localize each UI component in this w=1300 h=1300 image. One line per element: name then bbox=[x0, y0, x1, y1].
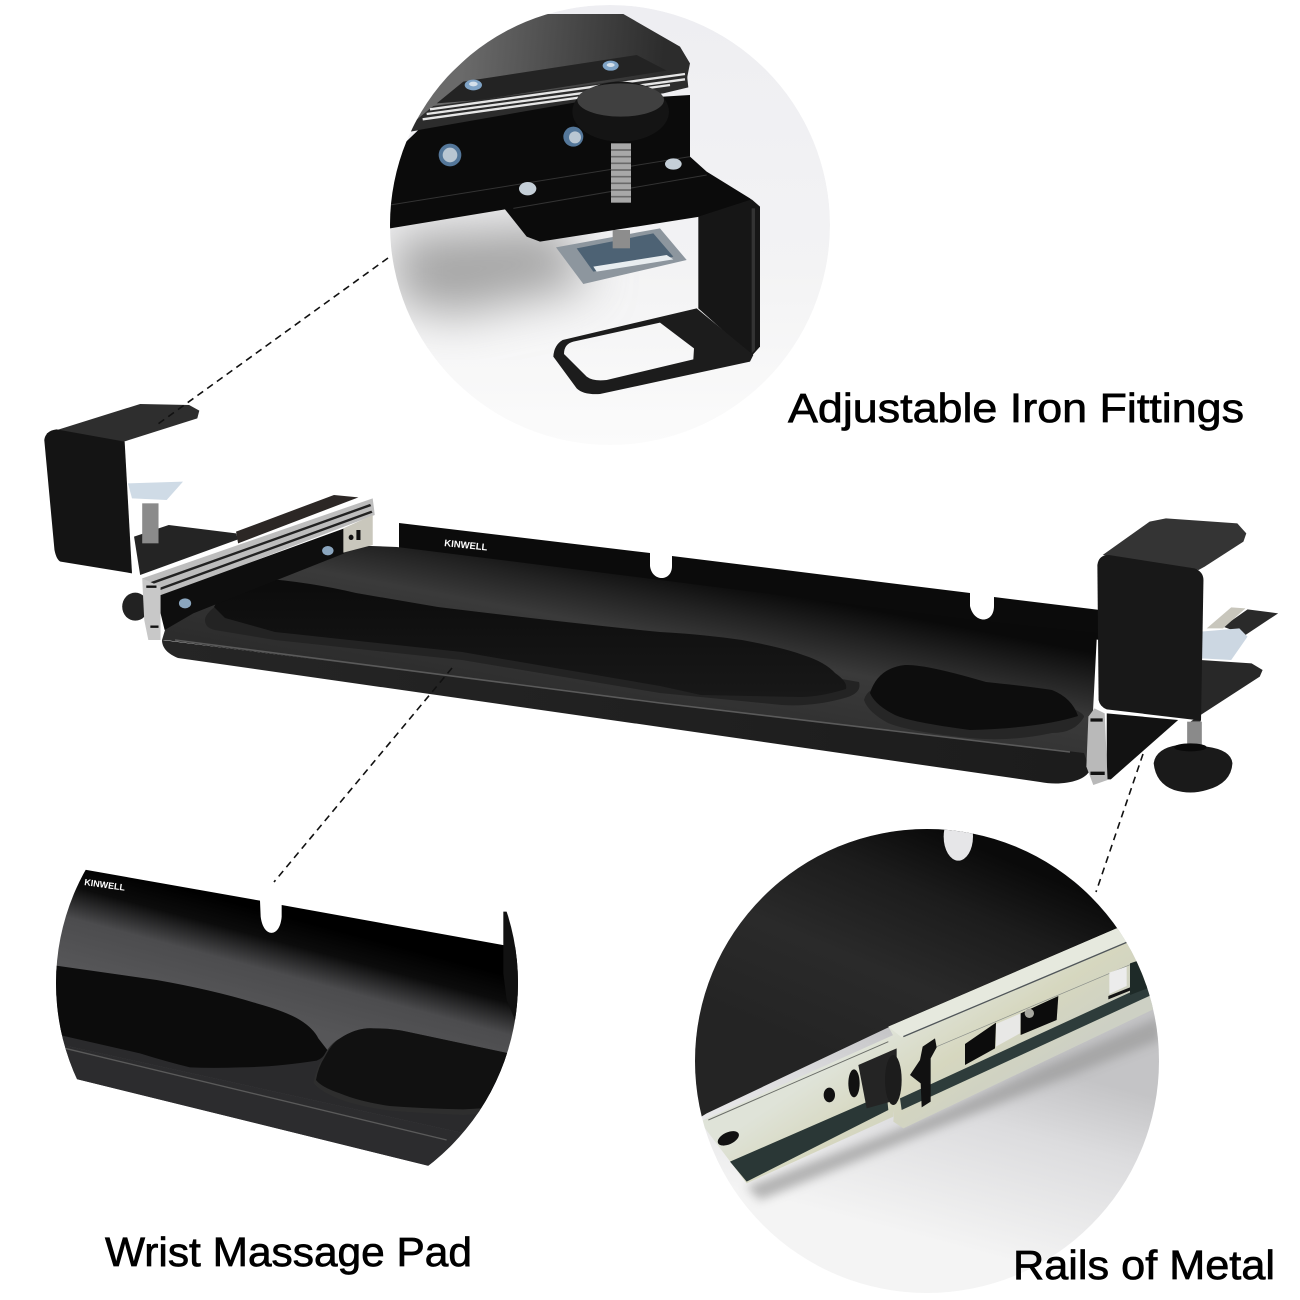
adjustment knob bbox=[1154, 743, 1232, 792]
circle background bbox=[390, 5, 830, 356]
back wall bbox=[399, 523, 1100, 640]
outer rail top band bbox=[888, 928, 1128, 1037]
bracket under tray bbox=[1107, 713, 1178, 779]
black tray plate bbox=[695, 829, 1118, 1116]
panel: adjustable iron fittings close-up bbox=[390, 5, 830, 394]
brand mark: KINWELL bbox=[444, 538, 488, 554]
knob behind bbox=[122, 593, 148, 621]
upper plate bbox=[1223, 609, 1278, 635]
rail bracket bbox=[156, 528, 344, 630]
inner rail groove bbox=[730, 1093, 888, 1182]
long pad bbox=[40, 963, 327, 1068]
dashed leader: fittings bbox=[158, 258, 388, 424]
front face bbox=[64, 1046, 462, 1166]
clamp foot with opening bbox=[553, 308, 753, 394]
top plate screws bbox=[465, 61, 619, 90]
rail photo bbox=[695, 829, 1159, 1293]
long wrist pad bbox=[205, 578, 860, 705]
clamp front bbox=[1097, 555, 1203, 721]
rail slots bbox=[965, 960, 1152, 1065]
dashed leader: wrist pad bbox=[274, 668, 452, 882]
lower bolt bbox=[613, 230, 630, 248]
right edge strip bbox=[503, 912, 518, 1020]
bracket screws bbox=[179, 546, 334, 608]
upper bolt bbox=[611, 143, 631, 203]
lock tab bbox=[910, 1038, 937, 1107]
plate notch bbox=[944, 830, 973, 861]
top plate bbox=[416, 14, 690, 121]
plate strip bbox=[437, 55, 667, 103]
outer rail bbox=[888, 928, 1180, 1128]
panel: wrist massage pad close-up bbox=[56, 870, 518, 1166]
clamp front bbox=[44, 429, 132, 573]
tray front face bbox=[162, 640, 1090, 784]
perforated dark section bbox=[858, 1048, 897, 1108]
keyboard tray bbox=[162, 523, 1100, 784]
tray surface and wall bbox=[56, 870, 518, 1166]
t-plate bbox=[1201, 628, 1248, 660]
slide rail end bbox=[1207, 607, 1245, 628]
clamp back bbox=[698, 199, 760, 356]
panel: rails of metal close-up bbox=[695, 829, 1159, 1293]
label: rails of metal: Rails of Metal bbox=[1013, 1242, 1275, 1288]
lip highlight bbox=[65, 1048, 447, 1140]
clamp top plate bbox=[46, 404, 199, 442]
bracket body bbox=[380, 95, 757, 242]
circle background bbox=[695, 829, 1159, 1293]
short pad bbox=[316, 1028, 508, 1114]
lower surface strip bbox=[60, 1029, 494, 1133]
threaded bolt bbox=[142, 503, 159, 543]
soft shadow under bracket bbox=[395, 225, 590, 315]
mounting plate bbox=[134, 525, 238, 575]
brand mark: KINWELL bbox=[84, 877, 126, 893]
outer rail groove bbox=[900, 982, 1155, 1110]
right clamp and rail bbox=[1086, 518, 1278, 792]
inner rail holes bbox=[716, 1069, 860, 1149]
t-plate bbox=[128, 482, 183, 500]
clamp photo bbox=[380, 14, 760, 394]
rail profile end bbox=[142, 578, 161, 640]
upper rail plate bbox=[236, 495, 358, 543]
adjustment knob bbox=[572, 82, 669, 142]
rail end bbox=[1086, 708, 1108, 785]
pad photo bbox=[56, 870, 518, 1166]
clamp top plate bbox=[1103, 518, 1246, 570]
inner rail bbox=[700, 1035, 902, 1183]
pressure plate bbox=[556, 228, 687, 284]
bracket screws bbox=[439, 127, 682, 195]
threaded bolt bbox=[1187, 722, 1202, 747]
lower plate bbox=[1190, 660, 1263, 722]
shadow beneath rail bbox=[747, 1017, 1160, 1200]
metal rail stripes bbox=[400, 72, 688, 133]
silver rail bbox=[142, 498, 375, 597]
label: adjustable iron fittings: Adjustable Iron Fittings bbox=[788, 385, 1244, 431]
roller bbox=[885, 1055, 902, 1105]
left clamp and rail bbox=[44, 404, 375, 640]
sliding rail end bbox=[343, 515, 373, 553]
tray surface bbox=[162, 545, 1097, 770]
label: wrist massage pad: Wrist Massage Pad bbox=[105, 1229, 472, 1275]
dashed leader: rails bbox=[1096, 754, 1143, 892]
short wrist pad bbox=[864, 665, 1084, 739]
